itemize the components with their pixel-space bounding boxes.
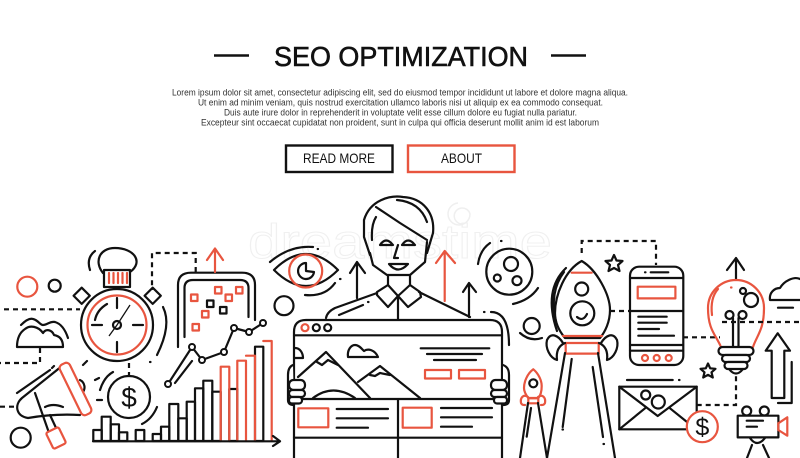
watermark: dreamstime [248,216,552,269]
hero text lines [421,348,489,378]
icon: small red rocket [520,369,547,458]
icon: video camera [738,406,787,458]
hand right [491,365,509,405]
icon: planet [478,241,542,345]
icon: red dollar coin [687,411,718,442]
hand left [288,365,305,405]
mountain picture [295,345,420,398]
content block right [403,408,492,428]
icon: cloud left [0,309,80,407]
decorative circles left [11,277,61,448]
icon: red dollar coin: $ [695,414,709,442]
icon: light bulb [708,258,764,374]
icon: cloud right [722,278,800,322]
button: about: ABOUT [441,150,482,166]
icon: stopwatch [74,248,166,376]
button: read more [286,146,392,172]
person [326,197,470,320]
icon: dollar coin: $ [121,382,137,413]
button: read more: READ MORE [303,150,375,166]
icon: smartphone [630,267,683,365]
icon: envelope [619,376,736,429]
button: about [408,146,514,172]
chart: trend line [165,320,266,387]
icon: dollar coin [95,372,157,424]
icon: megaphone [17,361,93,449]
icon: large rocket [547,241,720,458]
intro text [172,88,628,128]
panel: browser window [294,320,502,458]
chart: rising bars [93,341,280,446]
intro text: Lorem ipsum dolor sit amet, consectetur adipiscing elit, sed do eiusmod tempor incididunt ut labore et dolore magna aliqua. [172,88,628,98]
icon: eye [270,247,340,315]
icon: star top [606,255,622,271]
panel: data scatter [152,248,255,347]
intro text: Duis aute irure dolor in reprehenderit in voluptate velit esse cillum dolore eu fugiat nulla pariatur. [224,107,577,117]
watermark [248,203,552,269]
header [172,41,628,172]
window buttons [302,324,331,331]
content block left [298,408,388,428]
icon: up arrow outline [766,333,792,403]
intro text: Ut enim ad minim veniam, quis nostrud exercitation ullamco laboris nisi ut aliquip ex ea commodo consequat. [198,98,603,108]
title: SEO OPTIMIZATION [274,41,528,72]
intro text: Excepteur sint occaecat cupidatat non proident, sunt in culpa qui officia deserunt mollit anim id est laborum [201,118,599,128]
arrows behind person [350,251,476,317]
icon: star bottom [700,364,716,378]
